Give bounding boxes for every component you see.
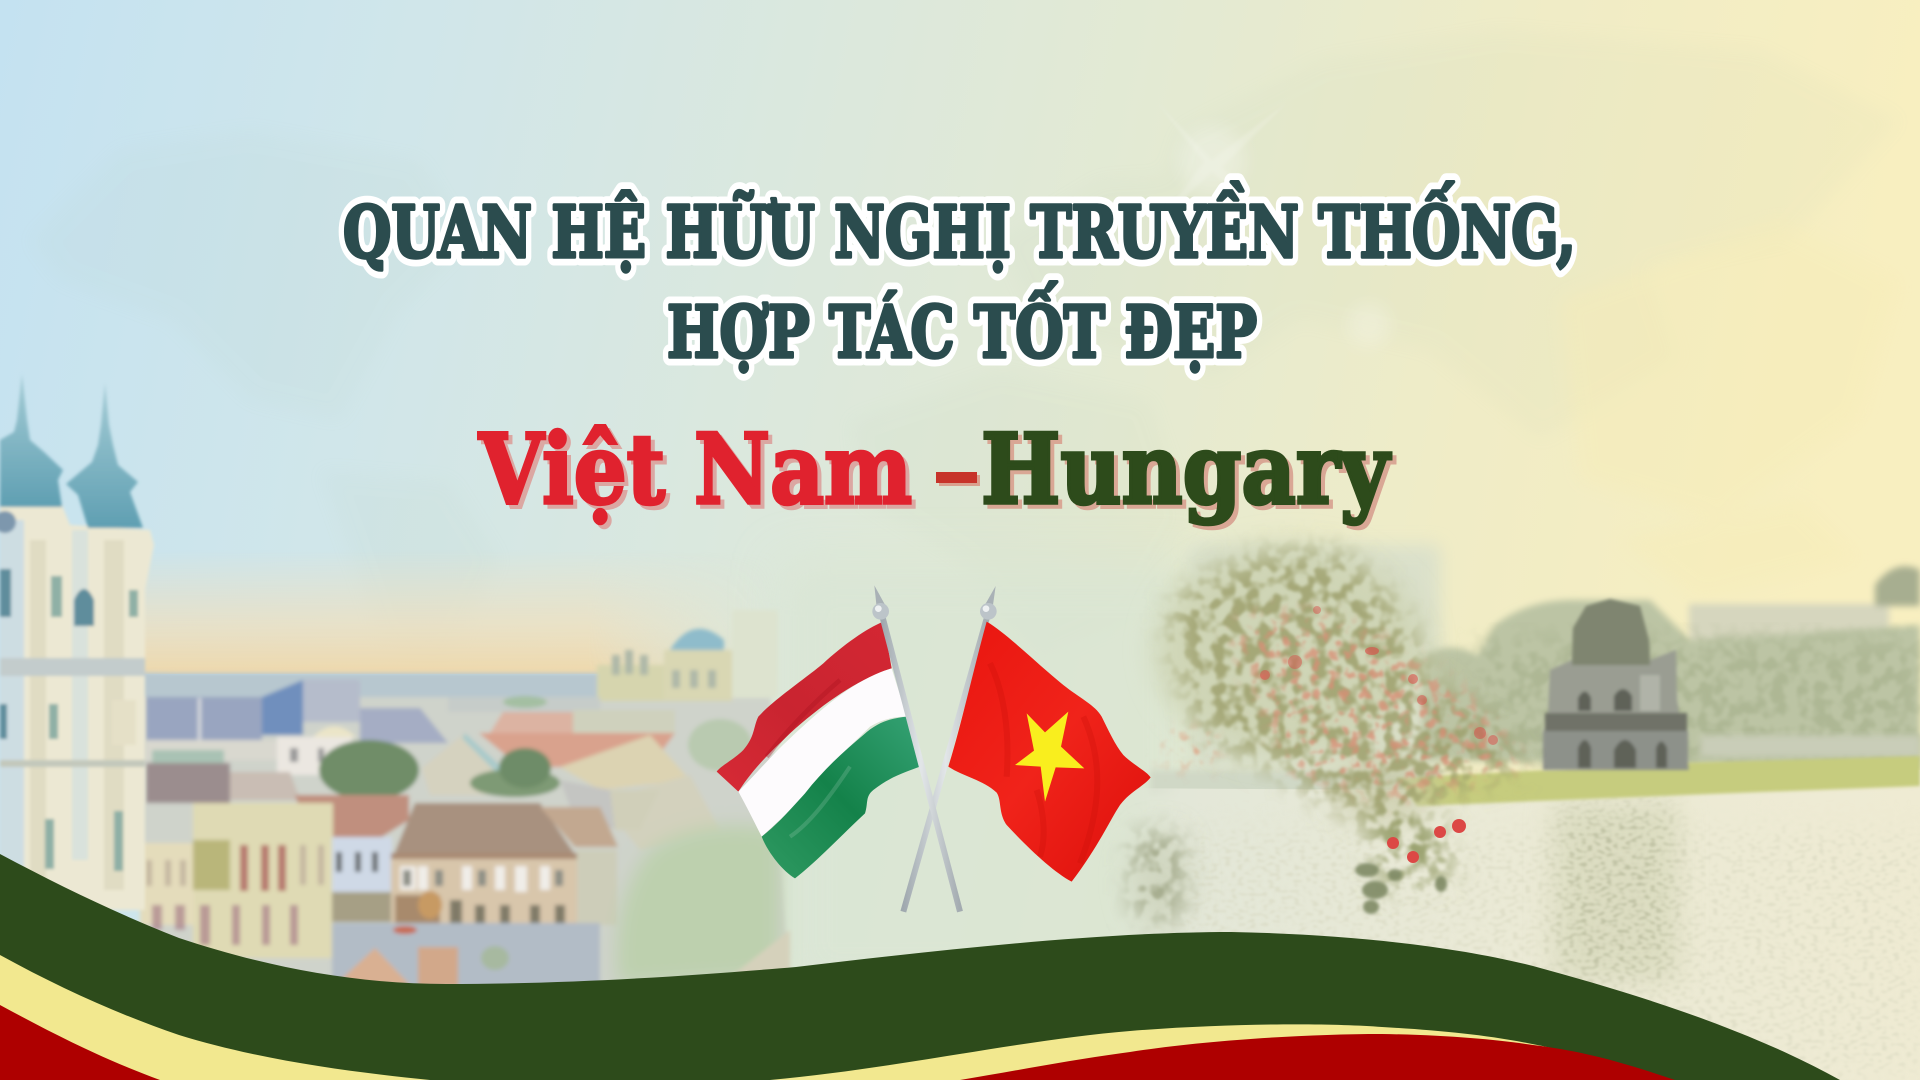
lake water [1100,770,1920,1080]
heading: Việt Nam - Hungary [478,413,1396,530]
orange roofs [422,710,720,850]
tower reflection [1553,802,1679,982]
turtle tower [1543,599,1689,770]
heading: Việt Nam - Hungary: Việt Nam [482,417,916,530]
dark roofs [146,750,660,857]
flag: Vietnam [948,622,1151,882]
basilica [597,610,778,701]
background: sunset haze above the city [143,565,730,674]
heading: Việt Nam - Hungary: Hungary [981,413,1392,526]
title: first line: QUAN HỆ HỮU NGHỊ TRUYỀN THỐNG, [343,181,1576,274]
title: first line: QUAN HỆ HỮU NGHỊ TRUYỀN THỐNG, [343,181,1576,274]
distant buildings [1689,566,1920,646]
grass island [1397,756,1920,806]
dark leaves [1355,863,1447,914]
yellow town houses [140,803,333,958]
heading: Việt Nam - Hungary: Việt Nam [478,413,912,526]
blue-white and brick house fronts [332,837,617,931]
flag pole: Hungary [872,585,960,912]
right tower dome [66,383,143,528]
pale building behind the tree [1190,545,1440,775]
foliage pink [1165,614,1520,800]
title: second line: HỢP TÁC TỐT ĐẸP [667,282,1257,374]
red blossoms [1260,606,1498,863]
left tower dome [0,374,63,507]
icon: crossed flags of Hungary and Vietnam [717,585,1151,912]
heading: Việt Nam - Hungary: Hungary [985,417,1396,530]
green tree clusters [319,696,752,800]
water speckles [1160,830,1920,1080]
green park [617,826,780,985]
street square [332,923,600,990]
white buildings [146,737,352,775]
flag: Hungary [717,622,920,878]
background: pale fog behind the flags [780,560,1200,1000]
foliage green [1135,552,1520,915]
photo: Eger city, Hungary [140,610,790,1000]
wave band: green [0,854,1840,1080]
flag pole: Vietnam [903,586,997,912]
tree line [1150,600,1920,795]
background: faint world map [30,30,1900,680]
photo: Hoan Kiem lake, Hanoi [1100,545,1920,1080]
church body [0,505,154,910]
icon: sparkle on the map [1155,100,1391,347]
distant skyline [140,673,620,697]
photo: Eger church towers [0,374,154,910]
base tone [140,672,790,1000]
title: second line: HỢP TÁC TỐT ĐẸP [667,282,1257,374]
windows [0,569,94,739]
slate roofs [146,680,600,743]
photo: flamboyant tree [1130,545,1520,930]
wave band: yellow [0,955,1660,1080]
wave band: red [0,1005,160,1080]
